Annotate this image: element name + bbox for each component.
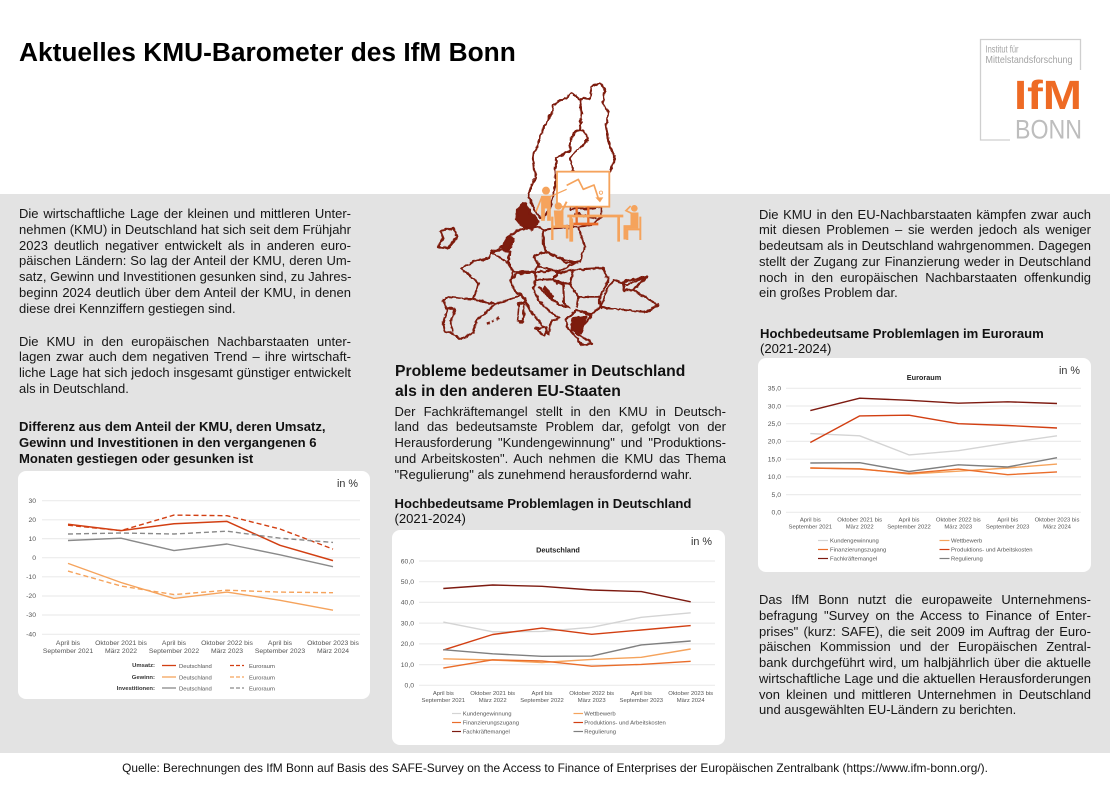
panel: euro area line chart: Oktober 2023 bis bbox=[1035, 518, 1079, 524]
heading: problems more significant in Germany bbox=[395, 363, 685, 400]
heading: difference chart: Differenz aus dem Anteil der KMU, deren Umsatz, bbox=[19, 419, 326, 434]
legend: Kundengewinnung bbox=[830, 538, 879, 544]
text block: left intro: 2023 deutlich negativer entwickelt als in anderen euro- bbox=[19, 238, 351, 253]
text block: right intro: mit diesen Problemen – sie werden jedoch als weniger bbox=[759, 222, 1091, 237]
text block: left second paragraph: liche Lage hat sich jedoch insgesamt günstiger entwickelt bbox=[19, 365, 351, 380]
panel: Germany line chart: April bis bbox=[631, 691, 652, 697]
legend: Finanzierungszugang bbox=[463, 720, 519, 726]
panel: Germany line chart: Oktober 2022 bis bbox=[569, 691, 614, 697]
text block: right intro: ein großes Problem dar. bbox=[759, 285, 898, 300]
heading: problems more significant in Germany: als in den anderen EU-Staaten bbox=[395, 382, 621, 400]
panel: Germany line chart: in % bbox=[691, 536, 712, 548]
panel: Germany line chart: Oktober 2021 bis bbox=[470, 691, 515, 697]
legend: Produktions- und Arbeitskosten bbox=[951, 548, 1033, 554]
text block: right SAFE survey: von kleinen und mittleren Unternehmen in Deutschland bbox=[759, 687, 1091, 702]
text block: middle: und Arbeitskosten". Auch nehmen die KMU das Thema bbox=[394, 451, 726, 466]
background band bbox=[0, 194, 1110, 753]
panel: difference line chart: -10 bbox=[26, 574, 36, 581]
heading: Germany chart: (2021-2024) bbox=[394, 511, 466, 526]
Gewinn lines bbox=[68, 563, 333, 610]
text block: middle: "Regulierung" als zunehmend herausfordernd wahr. bbox=[394, 467, 692, 482]
logo: IfM Bonn: Institut für bbox=[986, 44, 1019, 56]
text block: middle: land das bedeutsamste Problem dar, gefolgt von der bbox=[394, 419, 726, 434]
panel: difference line chart: März 2024 bbox=[317, 648, 349, 655]
text block: middle: Der Fachkräftemangel stellt in den KMU in Deutsch- bbox=[394, 404, 726, 418]
map of Europe bbox=[436, 82, 660, 346]
panel: Germany line chart: September 2023 bbox=[620, 698, 664, 704]
text block: left second paragraph: lagen zwar auch dem negativen Trend – ihre wirtschaft- bbox=[19, 349, 351, 364]
panel: euro area line chart: März 2023 bbox=[944, 524, 973, 530]
legend: Kundengewinnung bbox=[463, 712, 512, 718]
panel: euro area line chart: März 2024 bbox=[1043, 524, 1072, 530]
panel: Germany line chart: April bis bbox=[532, 691, 553, 697]
panel: difference line chart: 0 bbox=[32, 555, 36, 562]
panel: difference line chart: Oktober 2021 bis bbox=[95, 640, 147, 647]
text block: right intro: stellt der Zugang zur Finanzierung weder in Deutschland bbox=[759, 254, 1091, 269]
panel: euro area line chart: September 2023 bbox=[986, 524, 1030, 530]
legend: Regulierung bbox=[951, 556, 983, 562]
panel: difference line chart: April bis bbox=[268, 640, 293, 647]
text block: left intro: päischen Ländern: So lag der Anteil der KMU, deren Um- bbox=[19, 253, 351, 268]
legend: Deutschland bbox=[179, 676, 212, 682]
panel: euro area line chart: 20,0 bbox=[768, 439, 781, 446]
text block: left intro: satz, Gewinn und Investitionen gesunken sind, zu Jahres- bbox=[19, 269, 351, 284]
legend: Fachkräftemangel bbox=[830, 556, 877, 562]
panel: euro area line chart: April bis bbox=[997, 518, 1018, 524]
legend: Deutschland bbox=[179, 686, 212, 692]
legend bbox=[818, 538, 1033, 562]
panel: difference line chart: März 2022 bbox=[105, 648, 137, 655]
legend: Umsatz: bbox=[132, 663, 155, 669]
panel: difference line chart: -20 bbox=[26, 593, 36, 600]
text block: right intro: bedeutsam als in Deutschland wahrgenommen. Dagegen bbox=[759, 238, 1091, 253]
panel: euro area line chart: Euroraum bbox=[907, 373, 942, 382]
series lines bbox=[443, 585, 691, 668]
table bbox=[567, 216, 623, 242]
Umsatz lines bbox=[68, 515, 333, 561]
panel: euro area line chart: April bis bbox=[800, 518, 821, 524]
Investitionen lines bbox=[68, 531, 333, 567]
panel: euro area line chart: 5,0 bbox=[772, 492, 781, 499]
heading: difference chart bbox=[19, 419, 326, 466]
panel: difference line chart: April bis bbox=[162, 640, 187, 647]
heading: problems more significant in Germany: Probleme bedeutsamer in Deutschland bbox=[395, 363, 685, 380]
panel: euro area line chart: Oktober 2021 bis bbox=[837, 518, 882, 524]
text block: right SAFE survey: Das IfM Bonn nutzt die europaweite Unternehmens- bbox=[759, 592, 1091, 607]
text block: right SAFE survey: und ausgewählten EU-Ländern zu berichten. bbox=[759, 702, 1016, 717]
panel: euro area line chart: 35,0 bbox=[768, 386, 781, 393]
seated person right bbox=[624, 205, 640, 240]
legend: Investitionen: bbox=[117, 686, 155, 692]
series lines bbox=[810, 398, 1057, 475]
panel: Germany line chart: September 2022 bbox=[520, 698, 564, 704]
text block: right intro: Die KMU in den EU-Nachbarstaaten kämpfen zwar auch bbox=[759, 206, 1091, 222]
panel: difference line chart: Oktober 2023 bis bbox=[307, 640, 359, 647]
panel: difference line chart: September 2023 bbox=[255, 648, 305, 655]
panel: Germany line chart: 40,0 bbox=[401, 600, 414, 607]
panel: euro area line chart: 10,0 bbox=[768, 474, 781, 481]
legend: Wettbewerb bbox=[951, 538, 983, 544]
panel: Germany line chart: Oktober 2023 bis bbox=[668, 691, 713, 697]
panel: euro area line chart: September 2021 bbox=[789, 524, 832, 530]
legend: Euroraum bbox=[249, 686, 275, 692]
panel: difference line chart: -40 bbox=[26, 632, 36, 638]
logo: IfM Bonn: Mittelstandsforschung bbox=[986, 54, 1073, 66]
panel: difference line chart: 20 bbox=[28, 517, 36, 524]
panel: difference line chart: in % bbox=[337, 478, 358, 490]
panel: euro area line chart: September 2022 bbox=[887, 524, 931, 530]
panel: euro area line chart: 0,0 bbox=[772, 510, 781, 517]
panel: euro area line chart: 15,0 bbox=[768, 456, 781, 464]
text block: right intro: noch in den europäischen Nachbarstaaten offenkundig bbox=[759, 270, 1091, 285]
panel: Germany line chart: 10,0 bbox=[401, 662, 414, 669]
heading: difference chart: Gewinn und Investitionen in den vergangenen 6 bbox=[19, 435, 317, 450]
heading: difference chart: Monaten gestiegen oder gesunken ist bbox=[19, 451, 253, 466]
panel: euro area line chart: in % bbox=[1059, 365, 1080, 377]
heading: euro area chart bbox=[760, 326, 1044, 356]
panel: euro area line chart bbox=[758, 358, 1091, 572]
panel: difference line chart: September 2021 bbox=[43, 648, 93, 655]
panel: Germany line chart: 0,0 bbox=[405, 683, 414, 690]
panel: Germany line chart: März 2023 bbox=[578, 698, 606, 704]
panel: Germany line chart: 60,0 bbox=[401, 558, 414, 565]
text block: right SAFE survey bbox=[759, 592, 1091, 717]
text block: middle: Herausforderung "Kundengewinnung" und "Produktions- bbox=[394, 435, 726, 450]
heading: euro area chart: Hochbedeutsame Problemlagen im Euroraum bbox=[760, 326, 1044, 340]
text block: left second paragraph bbox=[19, 334, 351, 396]
text block: middle bbox=[394, 404, 726, 482]
panel: difference line chart: September 2022 bbox=[149, 648, 199, 655]
text block: right SAFE survey: päischen Kommission und der Europäischen Zentral- bbox=[759, 639, 1091, 654]
panel: Germany line chart: 50,0 bbox=[401, 579, 414, 586]
logo: IfM Bonn: BONN bbox=[1015, 114, 1082, 144]
legend: Euroraum bbox=[249, 664, 275, 670]
source note: Quelle: Berechnungen des IfM Bonn auf Basis des SAFE-Survey on the Access to Finance of Enterprises der Europäischen Zentralbank (https://www.ifm-bonn.org/). bbox=[122, 761, 988, 775]
legend: Regulierung bbox=[584, 730, 616, 736]
legend: Finanzierungszugang bbox=[830, 548, 886, 554]
heading: Germany chart: Hochbedeutsame Problemlagen in Deutschland bbox=[394, 496, 691, 510]
text block: right SAFE survey: wirtschaftliche Lage und die aktuellen Herausforderungen bbox=[759, 671, 1091, 686]
title: Aktuelles KMU-Barometer des IfM Bonn bbox=[19, 37, 516, 67]
panel: difference line chart bbox=[18, 471, 370, 699]
text block: right intro bbox=[759, 206, 1091, 300]
logo: IfM Bonn: IfM bbox=[1014, 72, 1082, 118]
panel: euro area line chart: 30,0 bbox=[768, 403, 781, 410]
legend bbox=[117, 663, 275, 692]
panel: Germany line chart bbox=[392, 530, 725, 745]
legend bbox=[452, 712, 666, 736]
panel: euro area line chart: April bis bbox=[899, 518, 920, 524]
seated person left bbox=[552, 202, 572, 242]
text block: right SAFE survey: befragung "Survey on the Access to Finance of Enter- bbox=[759, 608, 1091, 623]
panel: euro area line chart: 25,0 bbox=[768, 421, 781, 428]
panel: difference line chart: April bis bbox=[56, 640, 81, 647]
text block: left intro: Die wirtschaftliche Lage der kleinen und mittleren Unter- bbox=[19, 206, 351, 221]
icon: presentation with falling chart bbox=[535, 170, 642, 242]
text block: left intro: nehmen (KMU) in Deutschland hat sich seit dem Frühjahr bbox=[19, 222, 351, 237]
text block: left intro: diese drei Kennziffern gestiegen sind. bbox=[19, 301, 236, 316]
text block: left intro bbox=[19, 206, 351, 316]
panel: difference line chart: März 2023 bbox=[211, 648, 243, 655]
panel: Germany line chart: 30,0 bbox=[401, 620, 414, 627]
legend: Euroraum bbox=[249, 676, 275, 682]
panel: Germany line chart: 20,0 bbox=[401, 641, 414, 648]
presenter bbox=[536, 187, 567, 221]
text block: left second paragraph: Die KMU in den europäischen Nachbarstaaten unter- bbox=[19, 334, 351, 348]
panel: Germany line chart: März 2024 bbox=[677, 698, 705, 704]
panel: difference line chart: 10 bbox=[28, 536, 36, 543]
legend: Wettbewerb bbox=[584, 712, 616, 718]
heading: euro area chart: (2021-2024) bbox=[760, 341, 831, 356]
legend: Deutschland bbox=[179, 664, 212, 670]
panel: euro area line chart: Oktober 2022 bis bbox=[936, 518, 981, 524]
panel: difference line chart: Oktober 2022 bis bbox=[201, 640, 253, 647]
text block: left intro: beginn 2024 deutlich über dem Anteil der KMU, in denen bbox=[19, 285, 351, 300]
panel: euro area line chart: März 2022 bbox=[846, 524, 874, 530]
flipchart board bbox=[557, 172, 609, 207]
panel: Germany line chart: März 2022 bbox=[479, 698, 507, 704]
text block: right SAFE survey: bank durchgeführt wird, um halbjährlich über die aktuelle bbox=[759, 655, 1091, 670]
text block: left second paragraph: als in Deutschland. bbox=[19, 381, 129, 396]
panel: difference line chart: -30 bbox=[26, 612, 36, 619]
panel: Germany line chart: April bis bbox=[433, 691, 454, 697]
heading: Germany chart bbox=[394, 496, 691, 526]
legend: Produktions- und Arbeitskosten bbox=[584, 720, 666, 726]
legend: Gewinn: bbox=[132, 675, 155, 681]
logo: IfM Bonn bbox=[980, 38, 1082, 144]
text block: right SAFE survey: prises" (kurz: SAFE), die seit 2009 im Auftrag der Euro- bbox=[759, 624, 1091, 639]
legend: Fachkräftemangel bbox=[463, 730, 510, 736]
panel: difference line chart: 30 bbox=[28, 498, 36, 505]
panel: Germany line chart: September 2021 bbox=[422, 698, 465, 704]
panel: Germany line chart: Deutschland bbox=[536, 546, 580, 554]
